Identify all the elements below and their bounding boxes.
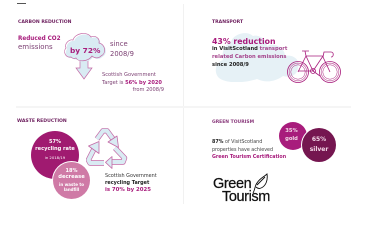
panel: waste reduction [17,118,157,199]
panel: carbon reduction [18,20,164,93]
heading: green tourism: GREEN TOURISM [212,120,254,125]
circle: 57% recycling rate: in 2018/19 [45,155,65,160]
text: transport emissions detail: related Carbon emissions [212,54,287,60]
text: transport emissions detail [212,46,288,68]
text: 87% certification: Green Tourism Certification [212,155,286,160]
text: scottish government target [102,72,164,93]
heading: carbon reduction: CARBON REDUCTION [18,20,72,25]
circle: 57% recycling rate: recycling rate [35,146,75,152]
text: since 2008/9: since [110,40,128,48]
panel: green tourism [212,120,336,204]
text: recycling target: Scottish Government [105,172,157,178]
logo wordmark [213,176,270,204]
text: reduced CO2 emissions: emissions [18,42,53,50]
text: transport emissions detail: in VisitScotland transport [212,46,287,52]
circle: 57% recycling rate [31,131,79,179]
text: scottish government target: from 2008/9 [133,87,164,93]
heading: transport: TRANSPORT [212,20,243,25]
circle: 65% silver [302,128,336,162]
circle: 35% gold: gold [285,136,298,142]
logo: green tourism [213,173,270,204]
logo wordmark: Tourism [222,188,270,204]
heading: waste reduction: WASTE REDUCTION [17,119,67,124]
circle: 18% decrease [53,162,90,199]
horizontal divider [16,106,351,108]
text: reduced CO2 emissions [18,35,61,50]
circle: 35% gold [279,122,307,150]
circle: 35% gold: 35% [285,128,298,134]
panel: transport [212,20,341,83]
circle: 65% silver: silver [310,146,328,152]
text: since 2008/9 [110,40,134,58]
circle: 18% decrease: decrease [58,174,85,180]
circle: 65% silver: 65% [312,136,326,143]
text: reduced CO2 emissions: Reduced CO2 [18,36,61,42]
logo wordmark: Green [213,176,251,192]
icon: cloud with down arrow [64,33,106,80]
circle: 18% decrease: landfill [64,187,79,192]
circle: 18% decrease: 18% [66,168,77,174]
text: 87% certification: properties have achieved [212,148,273,153]
top accent dash [17,3,26,4]
logo leaf [252,173,268,193]
text: scottish government target: Scottish Government [102,72,156,78]
text: transport emissions detail: since 2008/9 [212,62,249,68]
text: since 2008/9: 2008/9 [110,50,134,58]
circle: 18% decrease: in waste to [59,182,84,187]
text: 87% certification [212,139,286,160]
vertical divider [183,4,184,204]
label: by 72%: by 72% [70,46,101,55]
text: scottish government target: Target is 56% by 2020 [102,80,162,86]
circle: 57% recycling rate: 57% [49,138,61,144]
icon: recycling triangle [86,128,128,169]
text: recycling target: recycling Target [105,180,149,186]
icon: pale cloud background [216,33,298,82]
text: 87% certification: 87% of VisitScotland [212,140,262,145]
icon: bicycle [287,50,341,83]
text: recycling target: is 70% by 2025 [105,187,151,193]
text: recycling target [105,172,157,193]
text: 43% reduction: 43% reduction [212,37,276,46]
